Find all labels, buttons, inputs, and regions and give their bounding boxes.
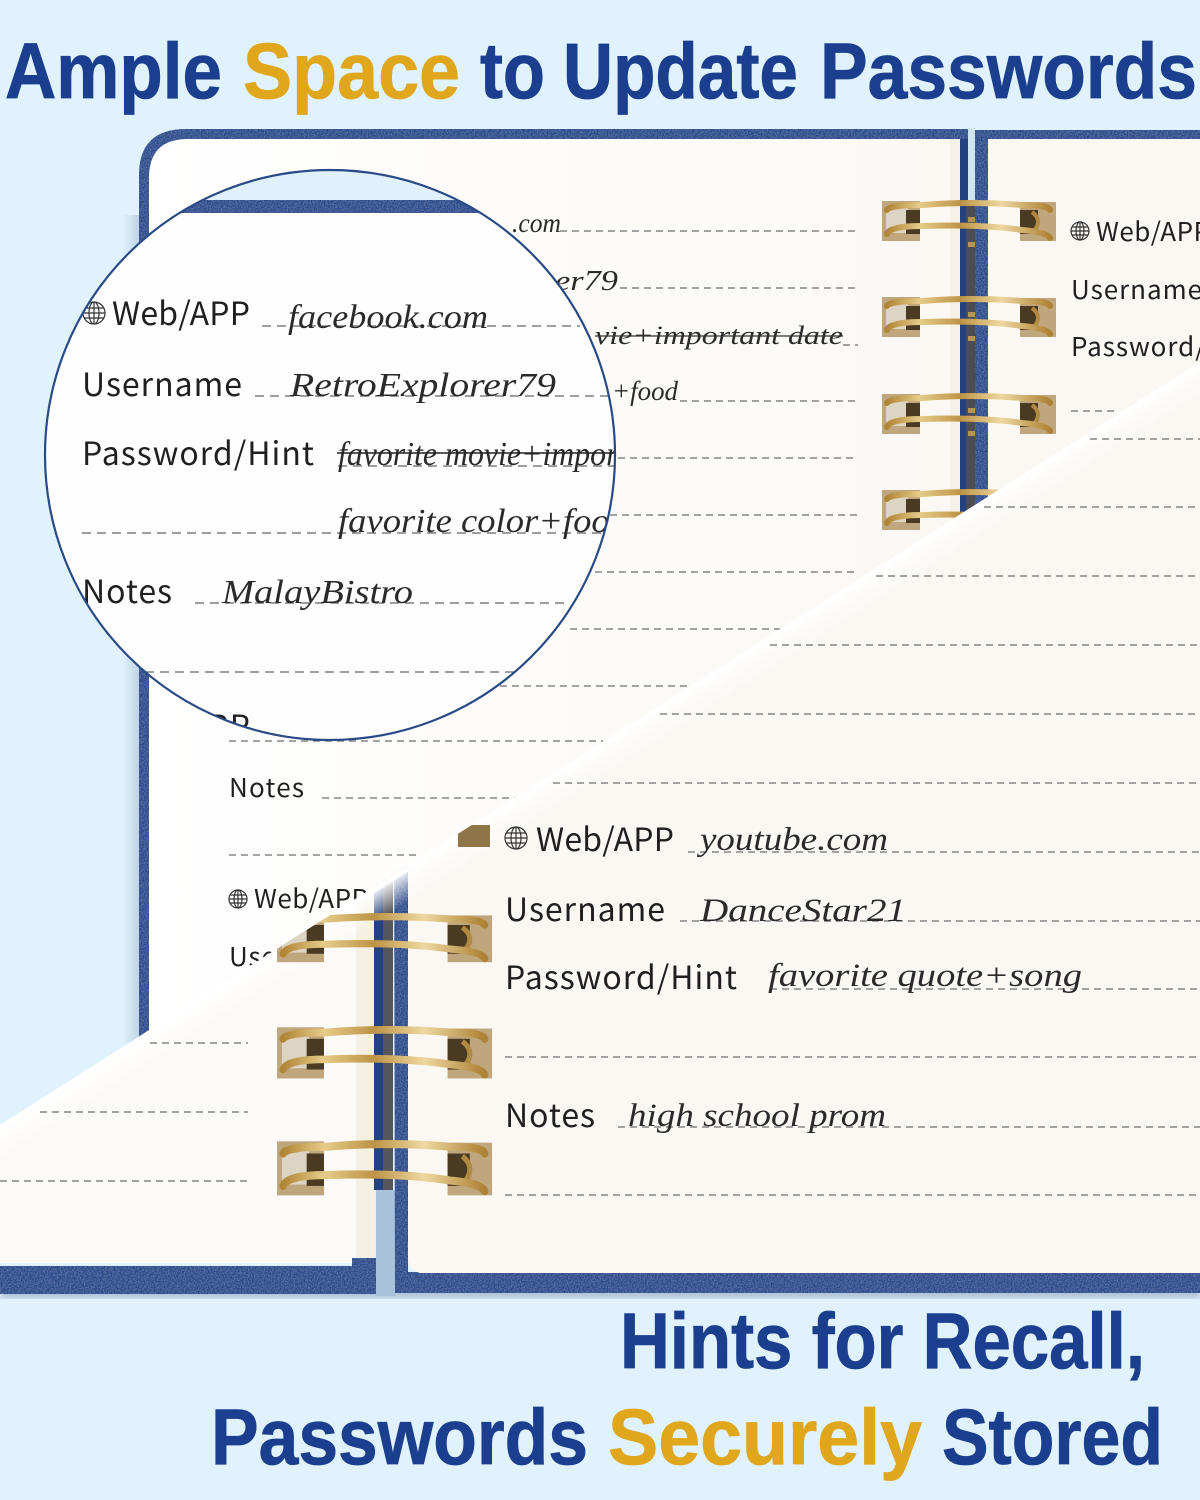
handwriting: lower form: youtube.com [697,822,888,858]
title: Update [563,26,798,115]
handwriting behind lens: vie+important date [595,321,843,350]
labels: right page: Username [1071,270,1200,307]
handwriting behind lens [512,208,843,406]
handwriting behind lens: er79 [555,265,619,297]
lens ruled lines [82,326,620,672]
labels: lower form [505,815,737,1137]
icon: globe lens [83,302,105,324]
labels: lens: Username [82,360,242,406]
icon: globe lower [505,827,527,849]
title: to [480,26,545,115]
labels: lens: PP [208,702,250,748]
handwriting: lens: facebook.com [288,299,488,336]
handwriting behind lens: .com [512,208,561,238]
labels: lower form: Web/APP [536,815,674,861]
right page [988,139,1200,1039]
inner page stack [950,139,960,1139]
title [5,26,1197,115]
spiral rings upper [882,201,1056,530]
title: Space [243,26,460,115]
right cover lower [394,866,1200,1293]
bottom heading: Securely [608,1392,922,1481]
labels: lower form: Notes [505,1091,595,1137]
labels: right page [1071,212,1200,364]
magnifier lens [44,168,616,742]
left cover lower [0,1258,376,1294]
lens ring [45,170,615,740]
cover shadow [122,215,140,1055]
handwriting: lens: favorite movie+important [338,436,669,473]
handwriting behind lens: +food [612,376,678,406]
labels: lens: Notes [82,567,172,613]
bottom heading: Passwords [211,1392,588,1481]
diagonal white edge [139,490,998,1036]
label: Web/APP left: Web/APP [254,879,368,916]
panel: lower notebook [0,362,1200,1300]
spine lower [374,875,395,1296]
ruled lines [229,231,1200,855]
panel: upper notebook [122,128,1200,1300]
bottom heading [211,1296,1163,1481]
label: Notes: Notes [229,768,304,805]
lens contents [46,171,614,726]
handwriting: lower form: high school prom [628,1098,886,1134]
shadow under covers [0,1293,1200,1299]
inner page stack lower [356,892,375,1258]
spiral rings lower [277,825,492,1195]
left page cover [139,129,968,1300]
label: Username left: Username [229,937,359,974]
icon: globe small [229,890,247,908]
left page [149,139,958,1300]
magnified cover edge [182,200,478,213]
handwriting: lower form: DanceStar21 [699,893,906,929]
spine [960,139,968,1139]
labels: lens [82,289,314,748]
handwriting: lens [222,304,614,610]
handwriting: lens: RetroExplorer79 [289,367,556,404]
ruled lines lower [0,411,1200,1195]
labels: lens: Web/APP [112,289,250,335]
bottom heading: Stored [942,1392,1163,1481]
icon: globe right [1071,222,1089,240]
title: Ample [5,26,222,115]
handwriting: lower form: favorite quote+song [768,958,1082,994]
handwriting: lens: favorite color+food [338,503,629,540]
edge highlight fade [0,402,1148,1130]
left page lower [0,898,356,1263]
labels: lower form: Password/Hint [505,953,737,999]
labels: lower form: Username [505,885,665,931]
handwriting: lens: MalayBistro [221,574,413,611]
right page lower [408,300,1200,1273]
right page cover [975,130,1200,1130]
labels: lens: Password/Hint [82,429,314,475]
handwriting: lower form [628,822,1082,1134]
